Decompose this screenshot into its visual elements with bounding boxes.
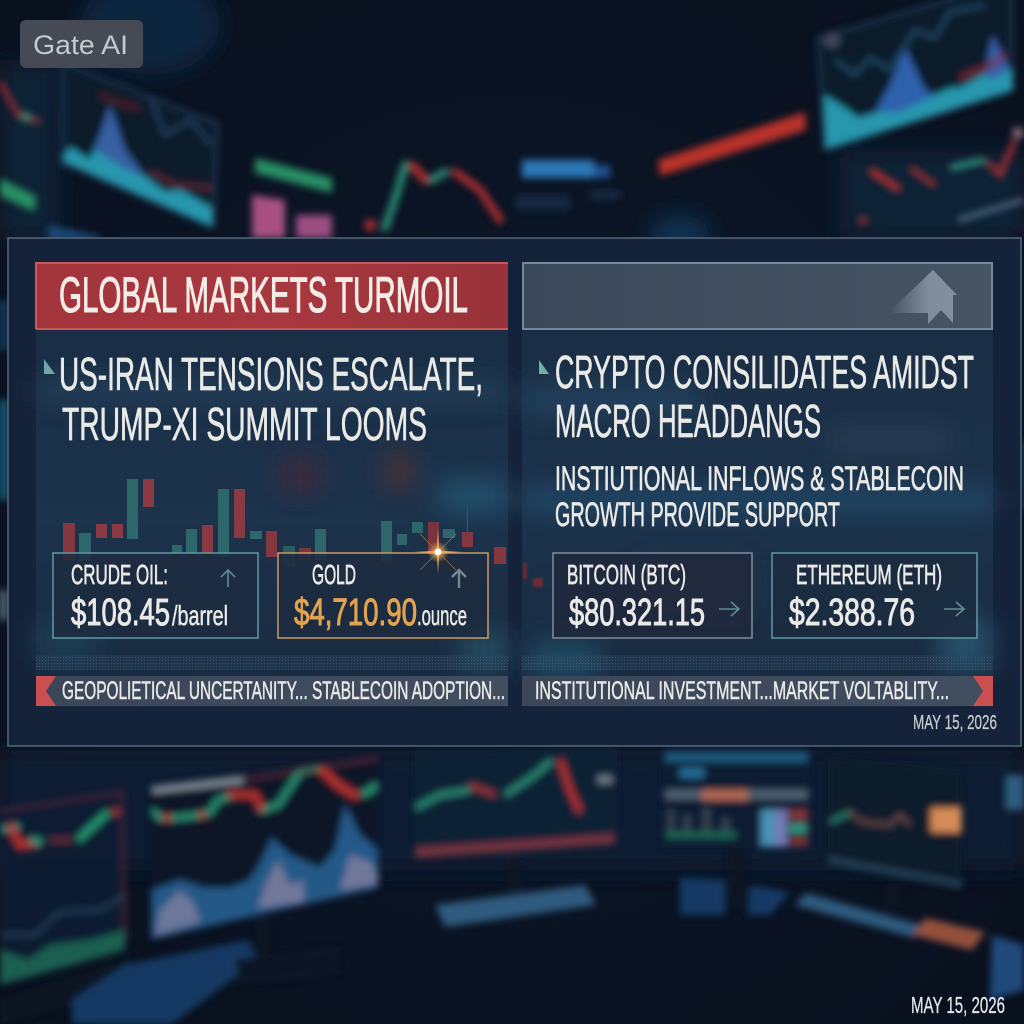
card: gold: GOLD [312,559,356,590]
card: gold: $4,710.90 [294,592,417,634]
dotted band: left [36,655,508,670]
background: right trace [858,127,1024,225]
right column background [522,329,993,707]
card: gold [278,553,488,638]
flag: red right [973,676,993,706]
background monitor: right [828,756,962,907]
card: gold: .ounce [417,600,467,631]
background: keyboard right [795,893,985,950]
background monitor: bottom left [0,790,130,1024]
candlestick chart: right edge [523,563,543,587]
background: candle trace [364,165,500,231]
icon: up arrow [221,570,235,587]
card: ethereum: $2.388.76 [789,592,915,634]
header: grey with arrow [523,263,992,329]
dotted band: right [522,655,993,670]
background monitor: top right [818,0,1012,150]
card: crude oil: CRUDE OIL: [71,559,168,590]
card: crude oil [53,553,258,638]
icon: right arrow [944,602,964,616]
candlestick chart: left [63,479,506,567]
headline: us-iran: US-IRAN TENSIONS ESCALATE, [59,348,483,400]
background monitor: top left [62,63,217,227]
background: desk reflection [72,920,340,1024]
header: global markets turmoil: GLOBAL MARKETS TURMOIL [59,267,468,323]
badge: gate ai: Gate AI [33,30,128,60]
headline: us-iran [44,348,483,450]
background: keyboard left [435,885,596,927]
background: blue ticker [515,160,620,210]
bullet triangle [44,359,55,374]
badge: gate ai [20,20,143,68]
headline: crypto [539,346,974,447]
icon: gold sparkle [414,528,462,574]
flag: red left [36,676,56,706]
headline: crypto: MACRO HEADDANGS [555,395,821,447]
left column background [36,329,508,707]
icon: up arrow [452,570,466,588]
card: crude oil: $108.45 [71,592,170,634]
headline: us-iran: TRUMP-XI SUMMIT LOOMS [62,398,427,450]
icon: right arrow [719,602,739,616]
main glass panel [8,238,1021,746]
card: crude oil: /barrel [172,600,228,631]
card: bitcoin [553,553,752,638]
card: ethereum [772,553,977,638]
subheading: inflows [555,460,964,534]
background monitor: bottom middle [415,748,617,890]
background: left edge traces [0,82,1024,620]
card: bitcoin: BITCOIN (BTC) [567,559,686,590]
bullet triangle [539,360,549,374]
background monitor: bottom centre [150,755,378,942]
ticker: left [36,676,508,706]
card: bitcoin: $80.321.15 [569,592,705,634]
icon: up arrow house [893,270,957,324]
background monitor: data screen [663,750,810,908]
ticker: left: GEOPOLIETICAL UNCERTANITY... STABLECOIN ADOPTION... [62,677,505,705]
background: green and pink tiles [252,158,332,238]
background: desk glow centre [680,878,790,915]
background: red ticker [658,112,806,176]
header: global markets turmoil [36,263,508,329]
background: right corner [990,775,1024,1000]
